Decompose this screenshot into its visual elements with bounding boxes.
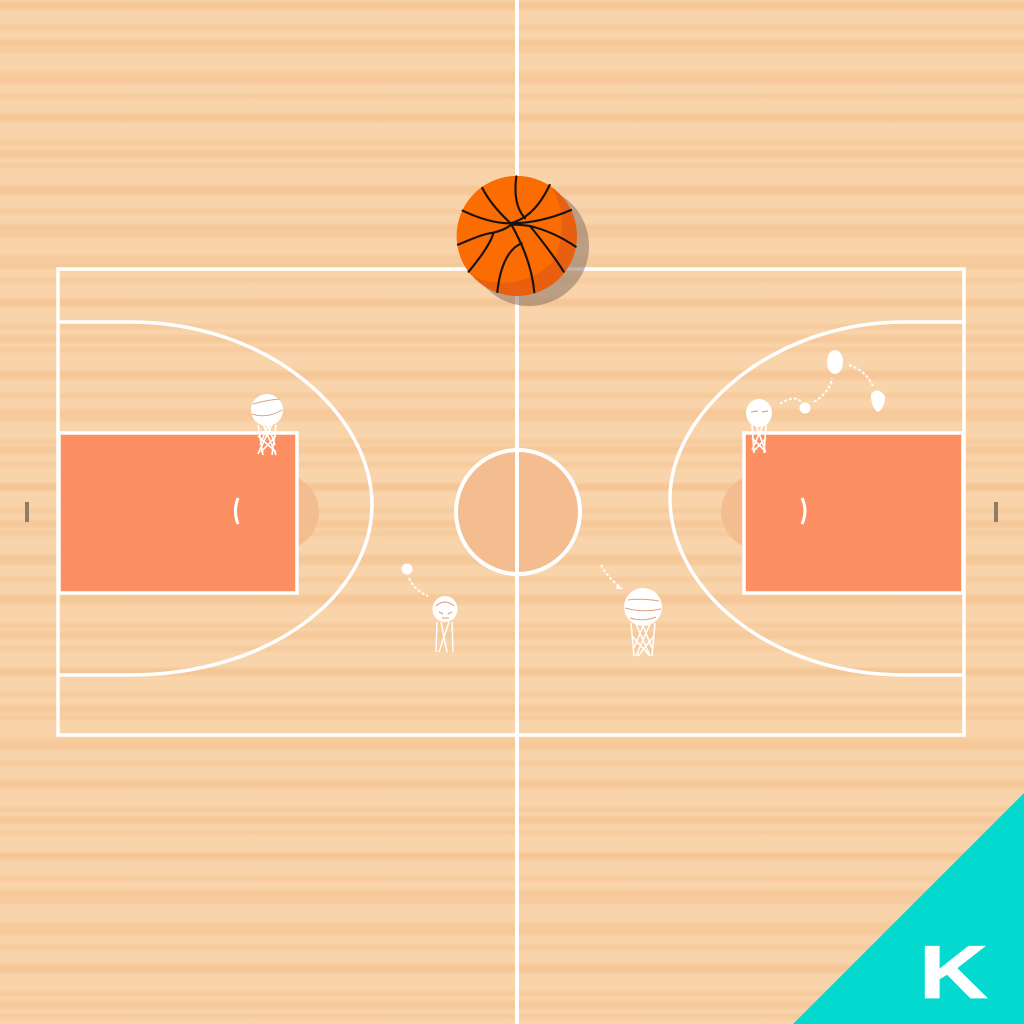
player marker top: [827, 350, 843, 374]
left key: [59, 433, 297, 593]
play diagram: lower left ball and path: [402, 564, 428, 596]
hoop: top left: [251, 394, 283, 455]
logo letter K: K: [919, 931, 988, 1015]
center circle: [456, 450, 580, 574]
dashed passes: [780, 365, 873, 404]
left three-point arc: [59, 322, 372, 675]
ball shadow: [469, 186, 589, 306]
right key mark: [802, 498, 805, 524]
hoop: lower left: [432, 596, 458, 652]
court boundary: [58, 269, 964, 735]
play diagram: top right: [780, 350, 885, 414]
left baseline tick: [25, 502, 29, 522]
right three-point arc: [670, 322, 963, 675]
half-court line: [515, 0, 519, 1024]
right free-throw semicircle: [721, 477, 744, 547]
center line over circle: [515, 450, 519, 574]
hoop: top right: [746, 399, 772, 453]
ball marker: [800, 402, 810, 414]
right key: [744, 433, 963, 593]
left free-throw semicircle: [297, 477, 319, 547]
right baseline tick: [994, 502, 998, 522]
basketball: [457, 176, 577, 296]
player marker right: [871, 390, 885, 412]
left key mark: [236, 498, 238, 524]
play diagram: lower right arrow: [601, 565, 623, 589]
hoop: lower right: [624, 588, 662, 656]
corner banner: [793, 793, 1024, 1024]
